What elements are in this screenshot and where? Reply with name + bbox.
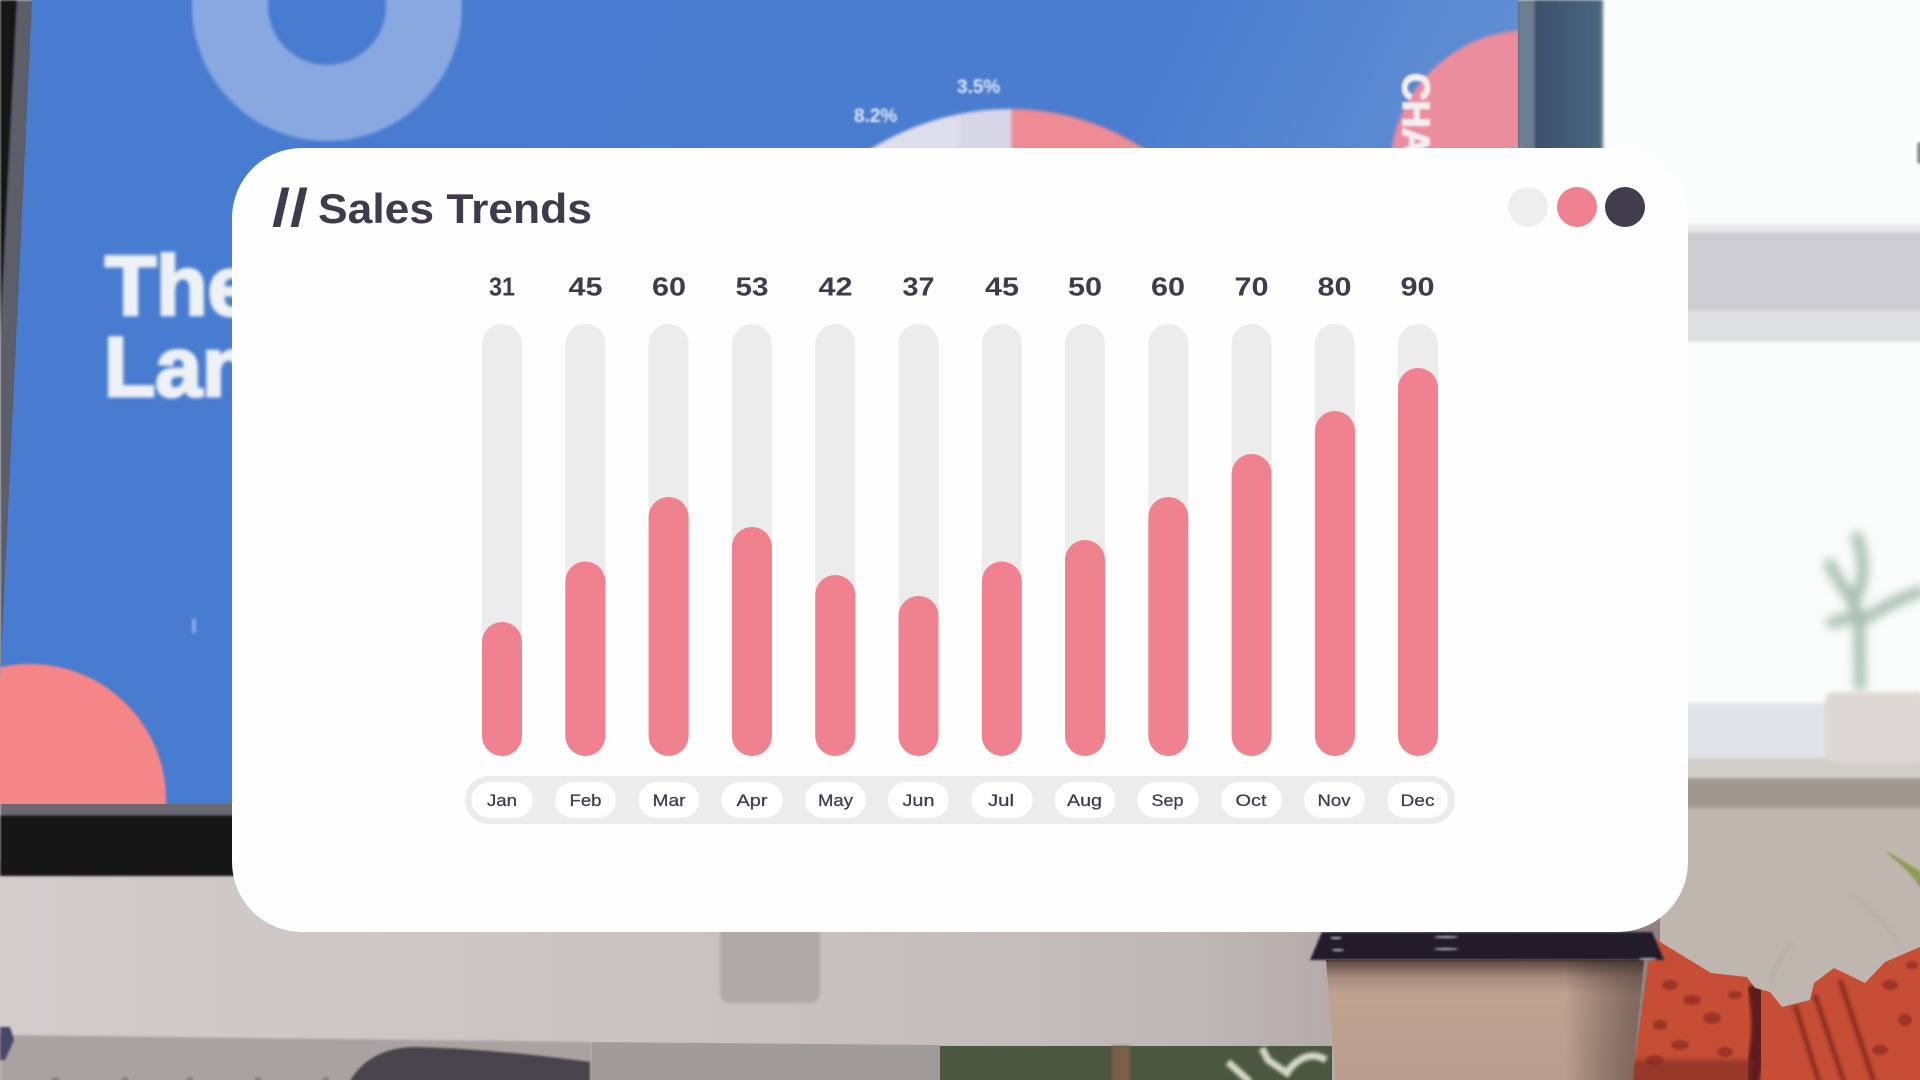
value labels: 53 xyxy=(736,272,768,302)
edge object xyxy=(1917,142,1920,164)
screen coral circle xyxy=(0,662,168,804)
green leaf xyxy=(1770,851,1920,985)
month labels: Mar xyxy=(652,791,686,810)
screen rotated text: CHART xyxy=(1394,73,1436,206)
screen pie labels: 8.2% xyxy=(854,106,897,127)
title: // xyxy=(272,179,308,238)
desk and monitor stand xyxy=(0,860,1660,1080)
month labels: Jul xyxy=(988,791,1014,810)
wall shelf xyxy=(1600,224,1920,342)
screen mark xyxy=(192,619,196,633)
lower desk objects xyxy=(0,1027,1332,1080)
window sill and wall xyxy=(1600,703,1920,1080)
object behind panel xyxy=(720,925,820,1003)
screen pink circle xyxy=(1390,28,1518,148)
bar fills xyxy=(482,368,1438,756)
value labels: 60 xyxy=(652,272,686,302)
month labels: Nov xyxy=(1318,791,1351,810)
value labels xyxy=(489,272,1434,302)
value labels: 45 xyxy=(568,272,602,302)
bar tracks xyxy=(482,324,1438,756)
value labels: 37 xyxy=(902,272,934,302)
screen pie labels xyxy=(854,77,1000,127)
value labels: 45 xyxy=(985,272,1019,302)
monitor frame xyxy=(0,0,1604,876)
value labels: 60 xyxy=(1151,272,1185,302)
month labels: Apr xyxy=(736,791,768,810)
bar chart xyxy=(482,272,1438,756)
screen pie chart xyxy=(868,106,1147,148)
screen pie labels: 3.5% xyxy=(957,77,1000,98)
month labels: Sep xyxy=(1152,791,1184,810)
legend dots xyxy=(1508,187,1645,227)
month labels: Aug xyxy=(1067,791,1102,810)
month labels: Feb xyxy=(570,791,602,810)
value labels: 90 xyxy=(1400,272,1434,302)
coffee cup xyxy=(1310,932,1664,1080)
month axis xyxy=(465,776,1455,824)
month labels: May xyxy=(818,791,854,810)
value labels: 42 xyxy=(818,272,852,302)
month labels xyxy=(487,791,1435,810)
month labels: Dec xyxy=(1400,791,1435,810)
value labels: 70 xyxy=(1234,272,1268,302)
panel: sales trends card xyxy=(232,148,1688,932)
screen headline: Lan xyxy=(104,320,253,414)
monitor screen xyxy=(0,0,1518,804)
screen donut xyxy=(230,0,424,103)
value labels: 31 xyxy=(489,272,515,302)
title: Sales Trends xyxy=(318,185,592,232)
blurred plant and vase xyxy=(1825,533,1920,762)
month labels: Jun xyxy=(902,791,934,810)
month labels: Jan xyxy=(487,791,517,810)
screen headline xyxy=(102,250,232,401)
value labels: 50 xyxy=(1068,272,1102,302)
value labels: 80 xyxy=(1318,272,1352,302)
red garment xyxy=(1630,930,1920,1080)
month labels: Oct xyxy=(1236,791,1267,810)
screen headline: The xyxy=(105,239,254,333)
title xyxy=(272,179,592,238)
